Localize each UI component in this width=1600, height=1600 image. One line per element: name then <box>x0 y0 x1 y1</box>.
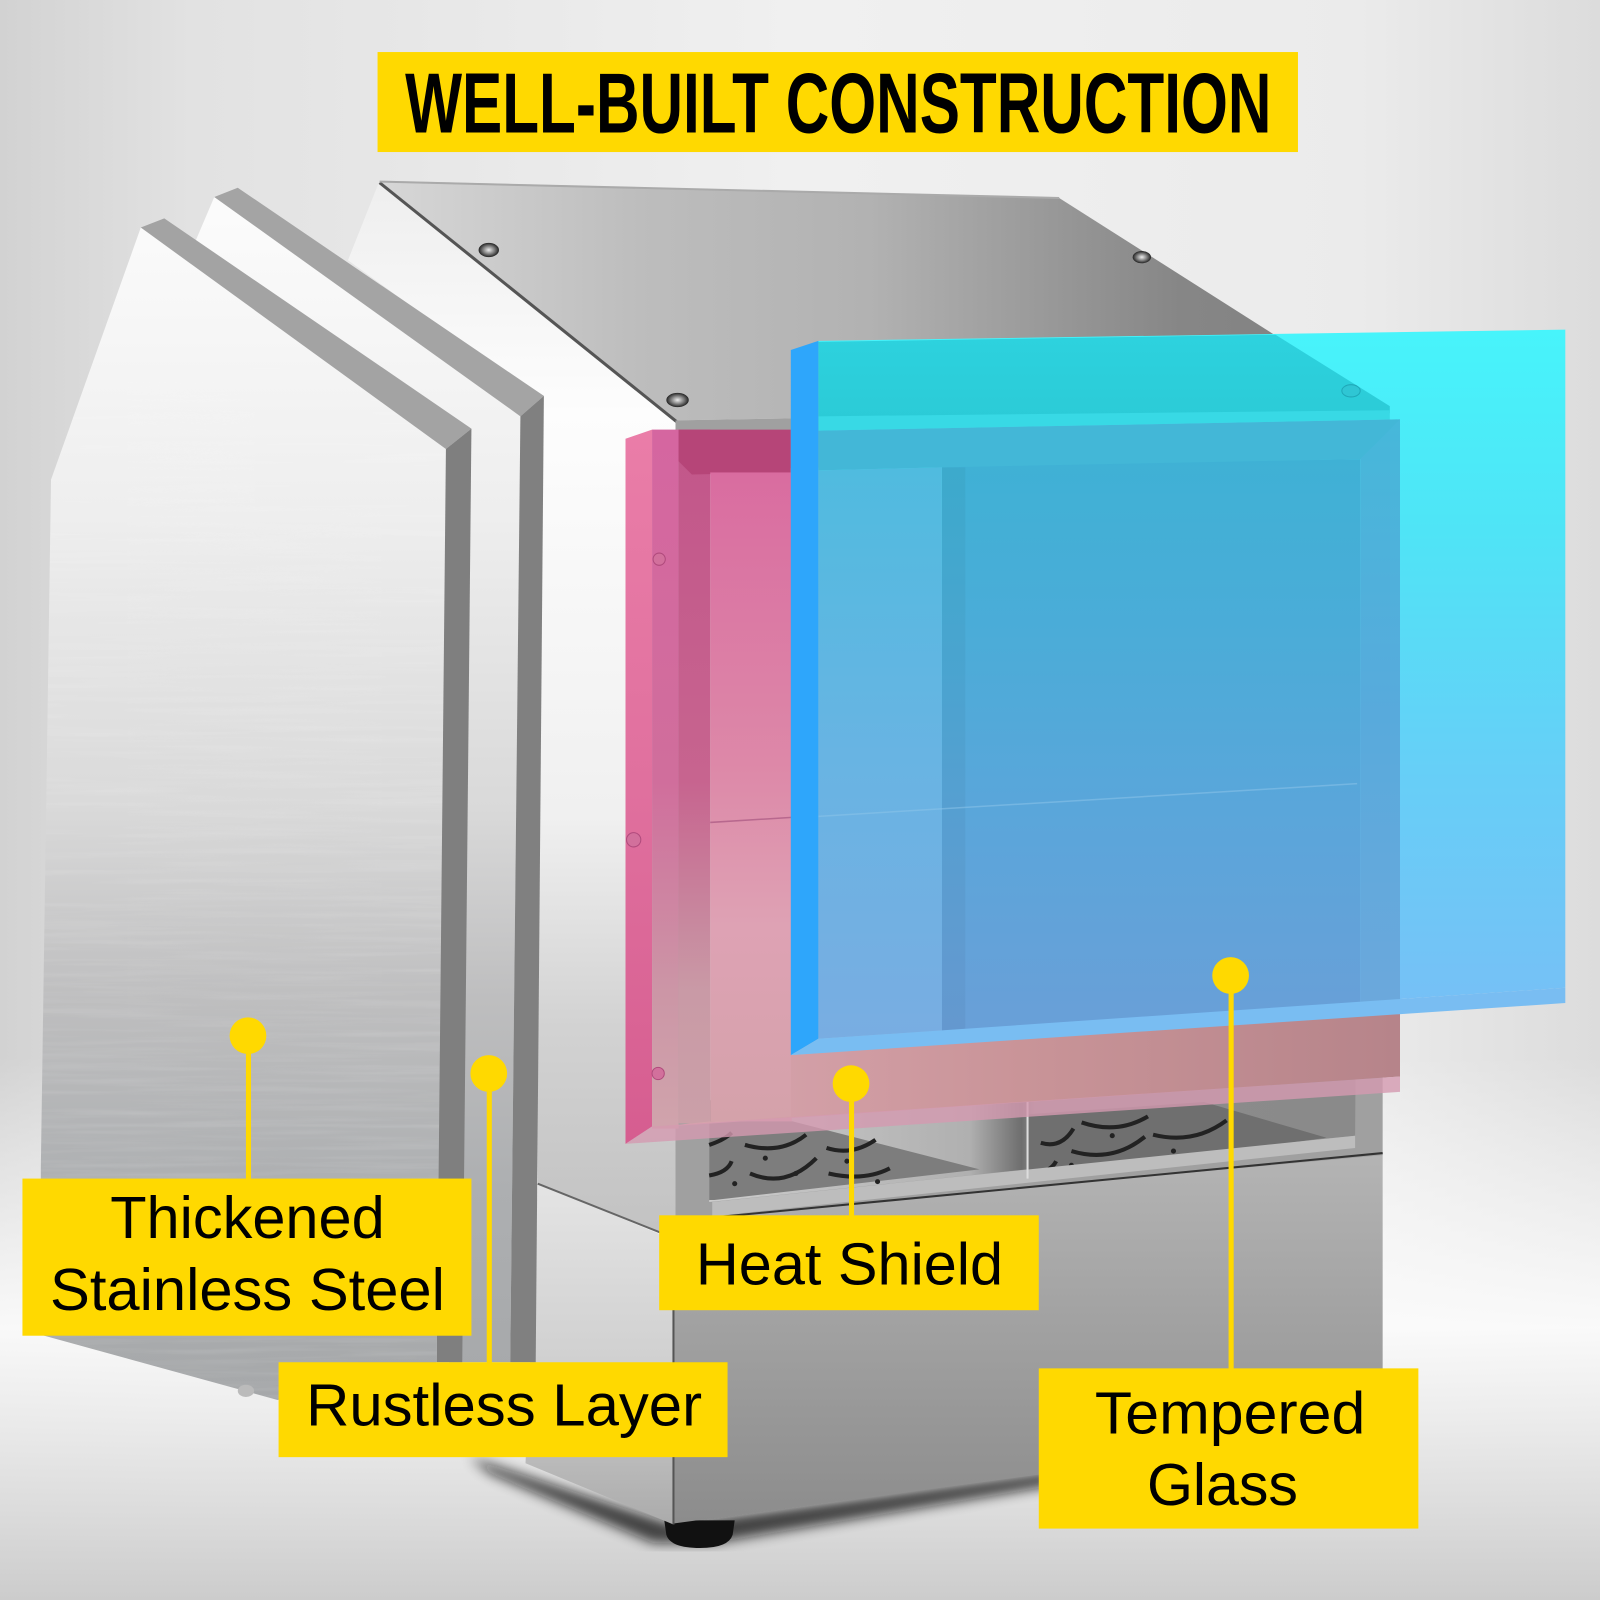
cabinet foot <box>664 1520 735 1548</box>
pink interior <box>710 472 792 1121</box>
glass over frame left <box>818 467 942 1039</box>
panel: tempered glass (blue) <box>791 330 1565 1055</box>
callout: thickened stainless steel <box>22 1017 471 1336</box>
perforated tray left <box>709 1100 980 1200</box>
screw rear left <box>479 243 499 257</box>
marker dot <box>1212 957 1249 994</box>
label box <box>1039 1368 1418 1529</box>
marker dot <box>230 1017 266 1054</box>
pink header <box>679 430 791 474</box>
label text: Stainless Steel <box>50 1256 445 1323</box>
glass header band <box>818 419 1400 470</box>
front sheet face <box>41 228 446 1400</box>
glass roof lip <box>818 410 1400 431</box>
floor shadow <box>469 1457 1051 1543</box>
glass shelf line <box>818 784 1357 816</box>
interior <box>709 459 1360 1202</box>
brushed texture <box>31 219 454 1408</box>
marker dot <box>470 1055 507 1092</box>
leader line <box>849 1084 854 1217</box>
label text: Rustless Layer <box>306 1372 702 1439</box>
leader line <box>487 1073 492 1364</box>
label box <box>22 1179 471 1336</box>
base side <box>526 1184 673 1524</box>
glass bottom edge <box>791 988 1565 1055</box>
rear sheet face <box>163 197 520 1362</box>
panel: thickened stainless steel <box>31 218 471 1408</box>
marker dot <box>833 1065 869 1102</box>
label box <box>659 1215 1039 1310</box>
perforated tray right <box>1028 1102 1327 1179</box>
front shelf strip <box>712 1136 1355 1216</box>
panel: heat shield (pink) <box>626 430 1400 1144</box>
pink frame <box>679 430 710 1123</box>
rear sheet side edge <box>510 396 544 1362</box>
glass over roof <box>818 335 1390 422</box>
pink column <box>652 430 679 1129</box>
title <box>378 52 1298 152</box>
callout: heat shield <box>659 1065 1039 1310</box>
glass over window <box>942 459 1360 1031</box>
pink side edge <box>626 430 652 1144</box>
product cabinet <box>348 181 1390 1548</box>
leader line <box>1229 976 1234 1370</box>
cabinet side wall <box>348 181 679 1240</box>
glass over frame right <box>1360 419 1400 1008</box>
pink bottom edge <box>626 1077 1400 1144</box>
label text: Thickened <box>110 1184 385 1251</box>
base front <box>673 1153 1383 1523</box>
title banner <box>378 52 1298 152</box>
glass outer face <box>818 330 1565 1039</box>
screw front left <box>666 393 689 407</box>
title text: WELL-BUILT CONSTRUCTION <box>405 56 1271 152</box>
sloped roof <box>380 181 1390 420</box>
centre glass join <box>1027 1051 1029 1179</box>
rear sheet top edge <box>214 188 544 416</box>
pink shelf line <box>710 817 792 822</box>
front sheet top edge <box>141 218 471 449</box>
panel: rustless layer <box>163 188 544 1362</box>
pink screws <box>627 553 665 1080</box>
front sheet side edge <box>437 429 471 1362</box>
callout: rustless layer <box>279 1055 728 1457</box>
pink lower band <box>652 1010 1400 1128</box>
glass frame inner strip <box>942 467 965 1031</box>
front frame <box>676 408 1383 1219</box>
label box <box>279 1362 728 1457</box>
leader line <box>246 1036 251 1181</box>
screw rear right <box>1133 251 1151 263</box>
glass screw <box>1342 385 1360 397</box>
front sheet screw <box>238 1385 254 1397</box>
label text: Tempered <box>1095 1380 1365 1447</box>
glass side edge <box>791 341 818 1055</box>
label text: Heat Shield <box>696 1231 1003 1298</box>
label text: Glass <box>1147 1451 1298 1518</box>
callout: tempered glass <box>1039 957 1418 1529</box>
